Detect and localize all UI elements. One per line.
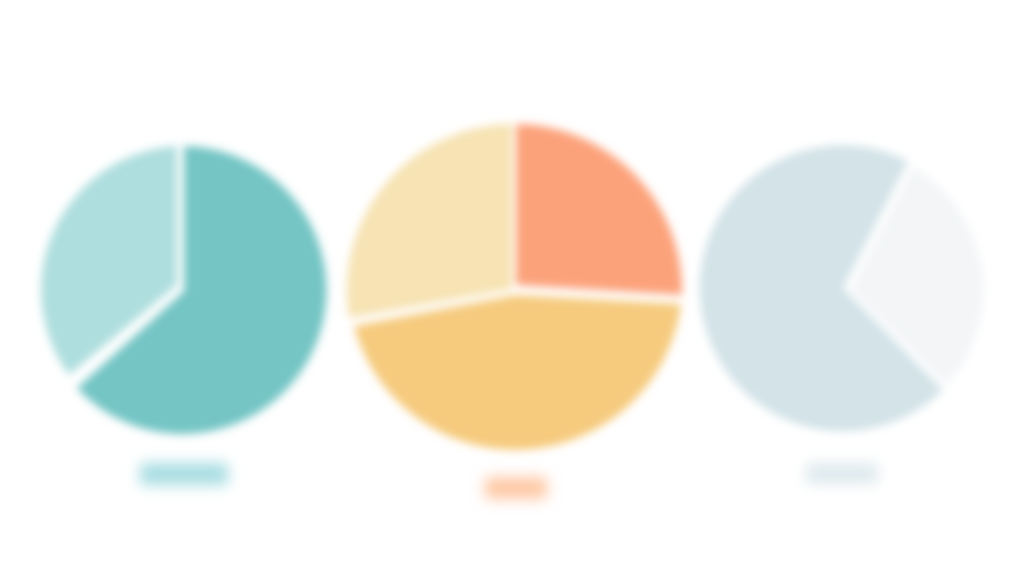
- label: left pie (illegible in reference): [140, 463, 228, 485]
- slice: pale yellow: [347, 124, 512, 318]
- slice: golden yellow: [354, 295, 681, 450]
- slice: dark teal: [77, 146, 327, 434]
- pie chart: middle warm: [347, 124, 682, 450]
- label: middle pie (illegible in reference): [485, 477, 547, 499]
- pie chart: left teal: [41, 146, 327, 434]
- label: right pie (illegible in reference): [806, 463, 878, 484]
- slice: light teal: [41, 146, 177, 375]
- slice: orange: [516, 124, 682, 295]
- pie chart: right grey-blue: [700, 145, 983, 431]
- slice: pale grey: [851, 167, 983, 385]
- slice: grey-blue: [700, 145, 943, 431]
